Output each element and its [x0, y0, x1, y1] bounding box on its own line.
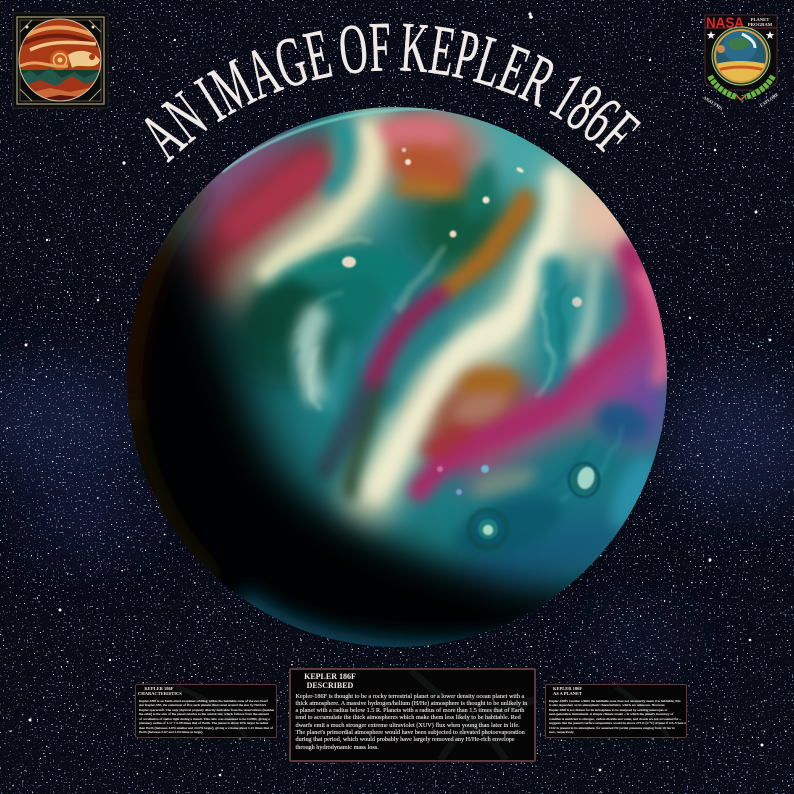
- heading: characteristics: [138, 686, 182, 696]
- badge mottos: ANALYSIS: [702, 95, 724, 111]
- text: as a planet body: suggests that the planet's surface temperature would be above 273 K (0 °C) at least if 0.5–5 bars of: [549, 721, 687, 725]
- NASA wordmark: NASA: [706, 14, 744, 32]
- planet spots and storms: [342, 148, 599, 548]
- text: as a planet body: Kepler-186f's location within the habitable zone does not necessarily mean it is habitable; this: [549, 698, 680, 702]
- text: as a planet body: [548, 698, 687, 734]
- text: characteristics body: Kepler spacecraft. The only physical property directly derivable from the observations (besides: [139, 708, 274, 712]
- icon: NASA planet program badge: EXPLORE: [759, 92, 779, 108]
- program label: PLANET: [751, 17, 769, 22]
- panel: described: [289, 668, 536, 762]
- planet underpainting: [178, 107, 667, 594]
- panel: as a planet: [545, 684, 687, 738]
- text: characteristics body: of occultation of stellar light during a transit. This ratio was measured to be 0.0380, giving a: [139, 717, 270, 721]
- heading: characteristics: KEPLER 186F: [144, 686, 174, 691]
- text: characteristics body: star Kepler-186, the outermost of five such planets discovered around the star by NASA's: [139, 703, 266, 707]
- text: characteristics body: than Earth (between 4.0% smaller and 24.0% larger), giving a volume about 1.41 times that of: [139, 726, 273, 730]
- text: as a planet body: next-generation instruments. A simple climate model – in which the planet's inventory of: [549, 712, 673, 716]
- text: as a planet body: Kepler-186f is too distant for its atmosphere to be analyzed by existing telescopes or: [549, 708, 667, 712]
- text: as a planet body: is also dependent on its atmospheric characteristics, which are unknown. However,: [549, 703, 665, 707]
- heading: as a planet: KEPLER 186F: [553, 686, 582, 691]
- planet swirl details: [275, 240, 625, 505]
- heading: described: [304, 672, 356, 690]
- heading: described: KEPLER 186F: [304, 672, 356, 681]
- heading: as a planet: AS A PLANET: [553, 691, 582, 696]
- text: as a planet body: CO2 is present in its atmosphere, for assumed N2 partial pressures ranging from 10 bar to: [549, 726, 675, 730]
- panel: characteristics: [135, 684, 277, 738]
- icon: NASA planet program badge: [702, 14, 779, 111]
- planet colour bands: [235, 117, 664, 565]
- text: described body: during that period, which would probably have largely removed any H/He-rich envelope: [296, 736, 515, 743]
- text: characteristics body: Kepler-186f is an Earth-sized exoplanet orbiting within the habitable zone of the red dwarf: [139, 698, 268, 702]
- heading: described: DESCRIBED: [307, 681, 353, 690]
- planet night-side shadow: [127, 181, 598, 647]
- text: described body: through hydrodynamic mass loss.: [296, 744, 379, 751]
- icon: NASA planet program badge: PROGRAM: [748, 22, 773, 27]
- planet Kepler 186F: [127, 107, 667, 647]
- text: described body: tend to accumulate the thick atmospheres which make them less likely to be habitable. Red: [296, 714, 521, 721]
- text: characteristics body: [138, 698, 274, 734]
- title: AN IMAGE OF KEPLER 186F: [144, 24, 641, 163]
- text: as a planet body: zero, respectively.: [549, 730, 574, 734]
- text: described body: [296, 692, 528, 751]
- text: described body: Kepler-186F is thought to be a rocky terrestrial planet or a lower density ocean planet with a: [296, 692, 524, 700]
- text: described body: The planet's primordial atmosphere would have been subjected to elevated photoevaporation: [296, 729, 525, 736]
- text: characteristics body: planetary radius of 1.17 ± 0.08 times that of Earth. The planet is about 10% larger in radius: [139, 721, 268, 725]
- text: characteristics body: Earth (between 0.97 and 2.03 times as large).: [139, 730, 203, 734]
- text: described body: dwarfs emit a much stronger extreme ultraviolet (XUV) flux when young than later in life.: [296, 722, 520, 729]
- text: described body: a planet with a radius below 1.5 R. Planets with a radius of more than 1.5 times that of Earth: [296, 707, 524, 714]
- heading: characteristics: CHARACTERISTICS: [138, 691, 182, 696]
- heading: as a planet: [553, 686, 582, 696]
- icon: planet emblem badge: [13, 13, 108, 108]
- text: characteristics body: the orbit) is the size of the planet relative to the central star, which follows from the amount: [139, 712, 269, 716]
- text: as a planet body: volatiles is restricted to nitrogen, carbon dioxide and water, and clouds are not accounted for –: [549, 717, 681, 721]
- text: described body: thick atmosphere. A massive hydrogen/helium (H/He) atmosphere is thought to be unlikely in: [296, 700, 527, 707]
